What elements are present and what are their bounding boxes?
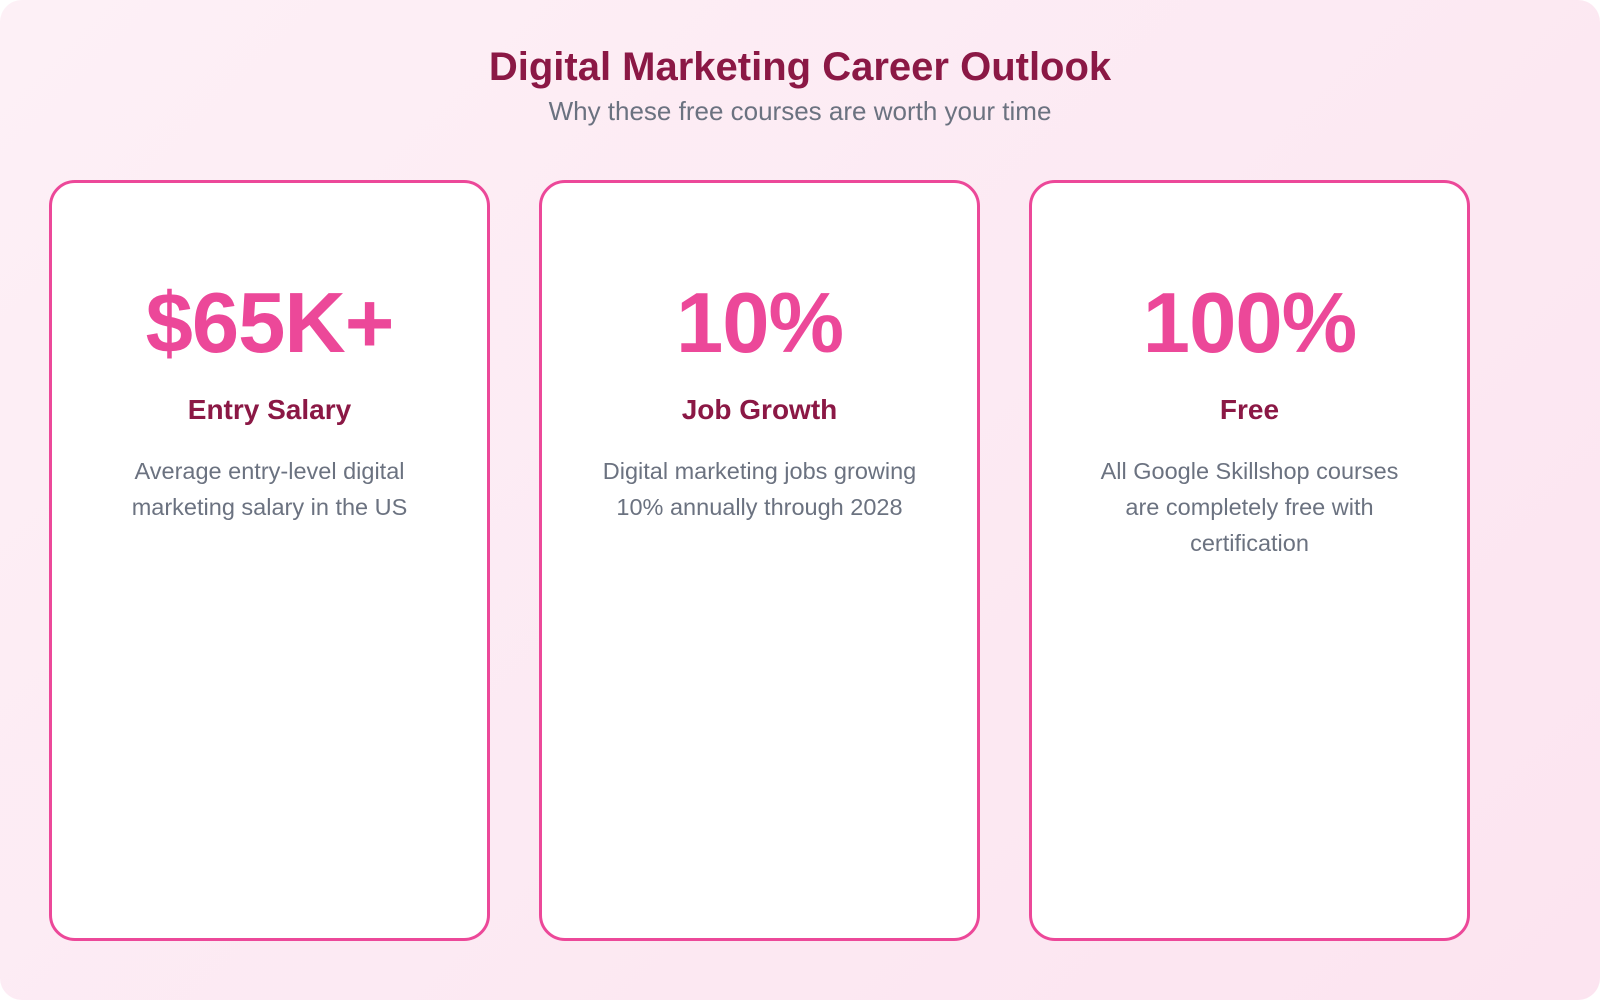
description: Digital marketing jobs growing 10% annually through 2028 — [603, 458, 916, 520]
stat: 100%: 100% — [1143, 276, 1356, 371]
subtitle: Why these free courses are worth your time — [549, 96, 1051, 126]
description: All Google Skillshop courses are completely free with certification — [1101, 458, 1398, 556]
label: free: Free — [1220, 394, 1279, 425]
stat: $65K+: $65K+ — [146, 276, 393, 371]
title: Digital Marketing Career Outlook — [489, 45, 1111, 89]
description: Average entry-level digital marketing salary in the US — [132, 458, 407, 520]
label: entry salary: Entry Salary — [188, 394, 351, 425]
panel: job growth — [539, 180, 980, 941]
label: job growth: Job Growth — [682, 394, 837, 425]
panel: entry salary — [49, 180, 490, 941]
panel: free — [1029, 180, 1470, 941]
stat: 10%: 10% — [676, 276, 843, 371]
